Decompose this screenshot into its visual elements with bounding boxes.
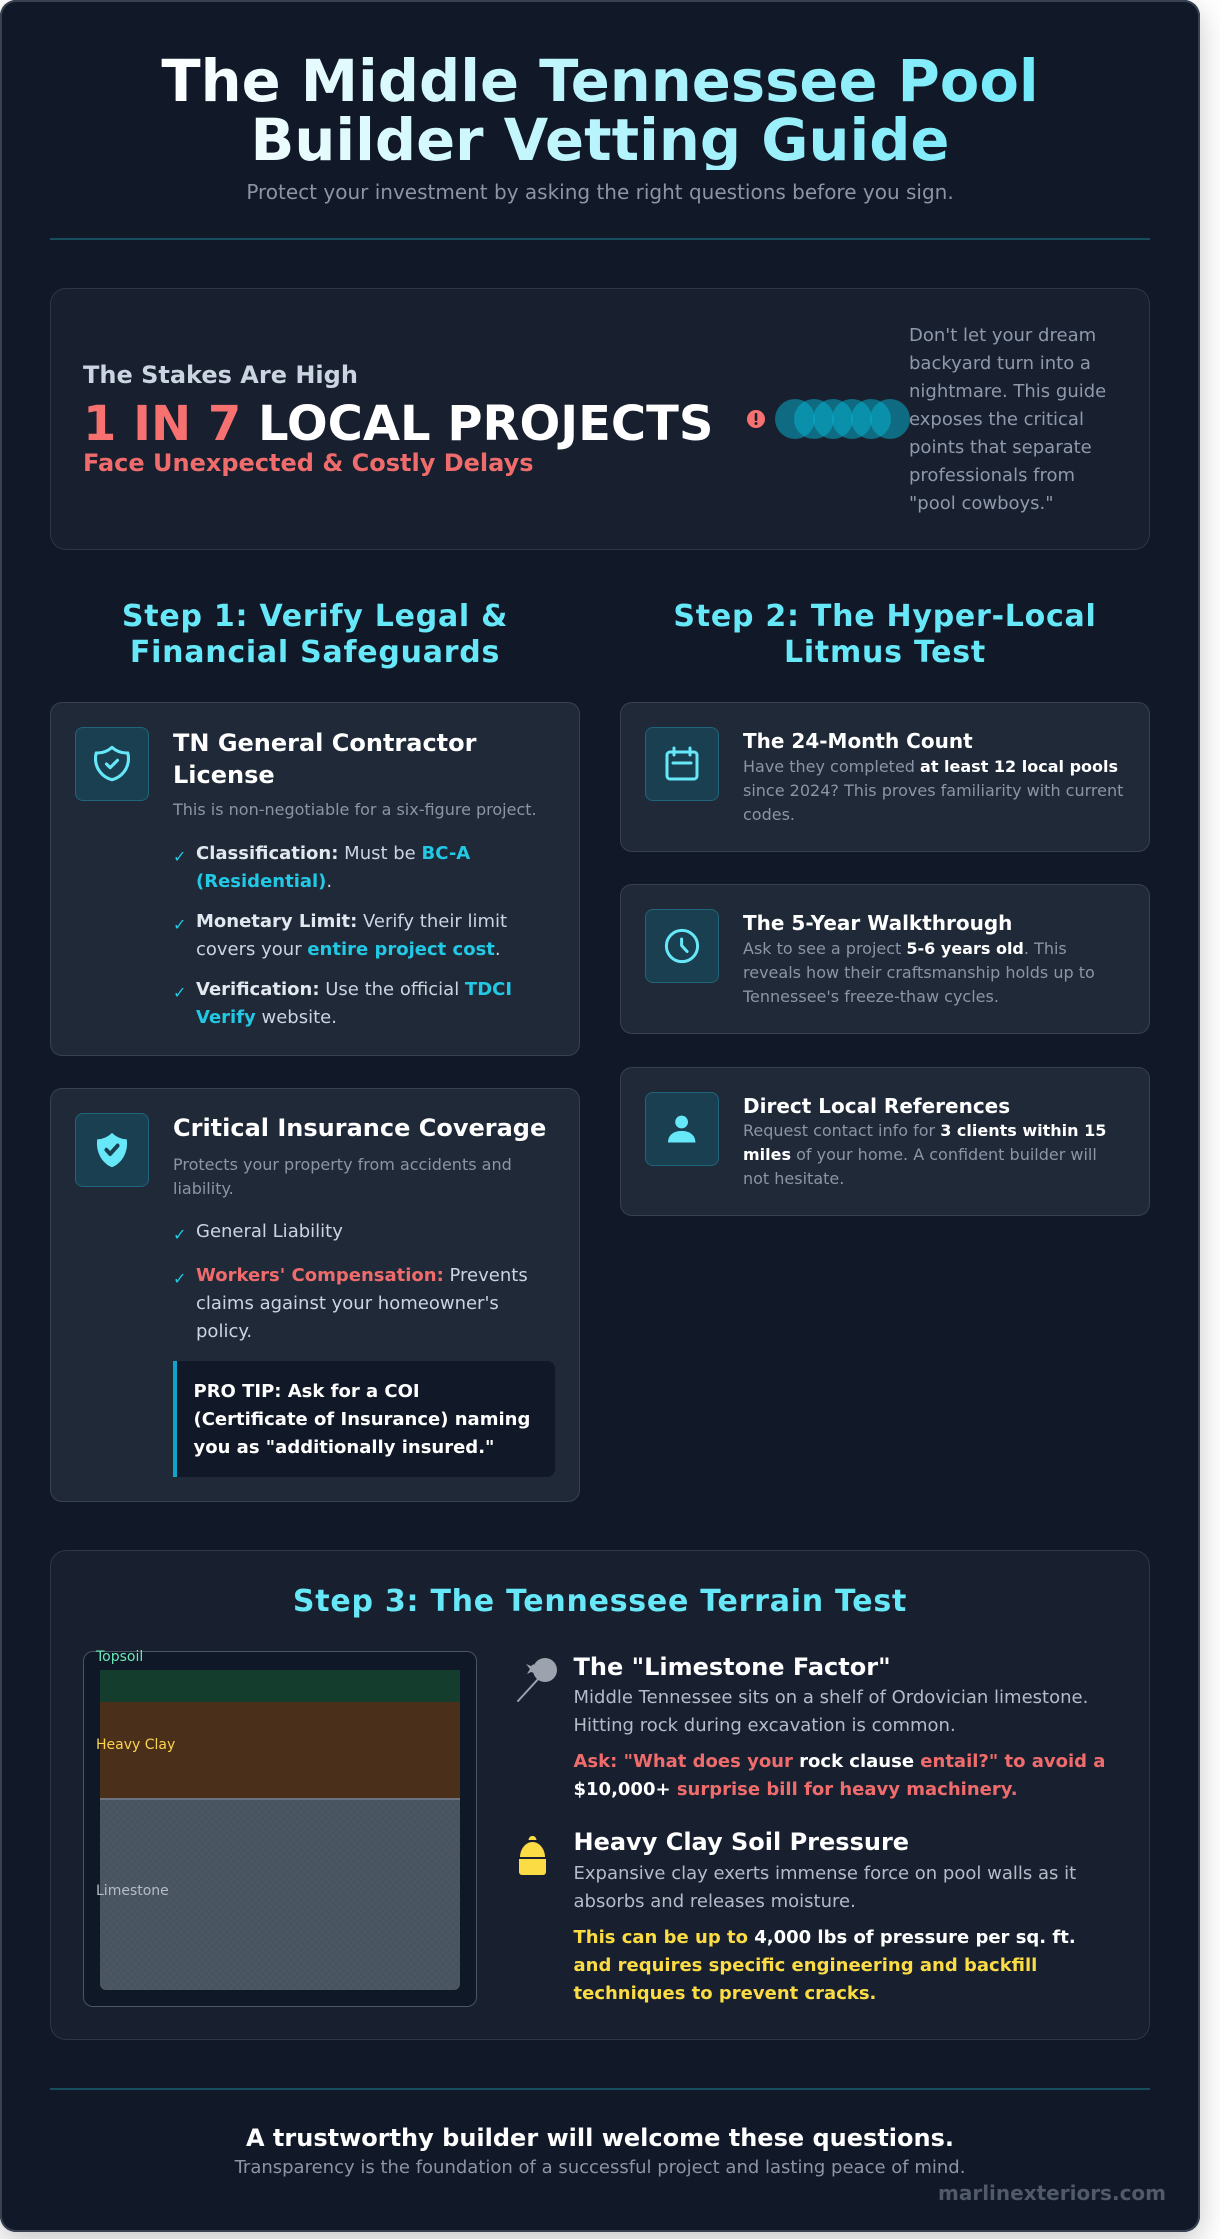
card: contractor license: ✓ [173, 847, 186, 866]
text: clay pressure warning: and requires specific engineering and backfill [574, 1955, 1037, 1976]
layer: limestone [100, 1798, 460, 1990]
hero description: professionals from [909, 465, 1075, 486]
card title: Direct Local References [743, 1094, 1010, 1118]
icon: solid shield check [75, 1113, 149, 1187]
card body: not hesitate. [743, 1169, 844, 1188]
card body: codes. [743, 804, 795, 824]
card body: Have they completed at least 12 local pools [743, 756, 1118, 776]
checklist item: classification [173, 843, 470, 892]
panel: step 1 column [50, 702, 580, 1502]
heading: step 2: Step 2: The Hyper-Local [673, 599, 1097, 634]
panel: step 2 column [620, 702, 1150, 1216]
hero description: nightmare. This guide [909, 381, 1106, 402]
text: clay pressure title: Heavy Clay Soil Pressure [574, 1828, 909, 1856]
card: insurance coverage: ✓ [173, 1225, 186, 1244]
checklist item: verification: Verification: Use the official TDCI [196, 978, 512, 1000]
icon: shield outline check [75, 727, 149, 801]
icon: calendar [645, 727, 719, 801]
hero description: "pool cowboys." [909, 493, 1054, 514]
checklist item: classification: (Residential). [196, 871, 332, 892]
card subtitle: This is non-negotiable for a six-figure project. [173, 800, 537, 819]
text: limestone factor question: Ask: "What does your rock clause entail?" to avoid a [574, 1751, 1105, 1772]
footer subline: Transparency is the foundation of a successful project and lasting peace of mind. [235, 2157, 965, 2178]
text: limestone factor question [574, 1751, 1105, 1800]
card subtitle [173, 1155, 512, 1198]
hero description: exposes the critical [909, 409, 1084, 430]
footer headline: A trustworthy builder will welcome these questions. [246, 2124, 954, 2152]
text: clay pressure warning: techniques to prevent cracks. [574, 1983, 876, 2004]
card title: TN General Contractor [173, 729, 476, 757]
hero kicker: The Stakes Are High [83, 361, 358, 389]
heading: step 1: Step 1: Verify Legal & [122, 599, 508, 634]
card: contractor license: ✓ [173, 982, 186, 1002]
label: topsoil: Topsoil [96, 1649, 143, 1665]
card body: miles of your home. A confident builder will [743, 1145, 1097, 1164]
checklist item: workers compensation: policy. [196, 1321, 252, 1342]
card body: Ask to see a project 5-6 years old. This [743, 938, 1067, 958]
card subtitle: liability. [173, 1179, 234, 1198]
card body: Tennessee's freeze-thaw cycles. [743, 986, 999, 1006]
text: limestone factor body: Hitting rock during excavation is common. [574, 1715, 956, 1736]
heading: step 3: Step 3: The Tennessee Terrain Test [293, 1584, 907, 1619]
text: limestone factor body: Middle Tennessee sits on a shelf of Ordovician limestone. [574, 1687, 1088, 1708]
title: Builder Vetting Guide [250, 107, 950, 174]
hero statistic caption: Face Unexpected & Costly Delays [83, 449, 534, 477]
card: direct references [620, 1066, 1150, 1216]
card: 24-month count [620, 702, 1150, 852]
label: limestone: Limestone [96, 1883, 169, 1899]
icon: pickaxe [517, 1658, 557, 1702]
text: clay pressure body [574, 1863, 1076, 1912]
text: clay pressure body: absorbs and releases moisture. [574, 1891, 856, 1912]
pro tip text: PRO TIP: Ask for a COI [194, 1381, 420, 1402]
pro tip text: (Certificate of Insurance) naming [194, 1409, 530, 1430]
card: 5-year walkthrough [620, 884, 1150, 1034]
card title: The 5-Year Walkthrough [743, 911, 1012, 935]
watermark: brand url: marlinexteriors.com [938, 2181, 1166, 2205]
card title [173, 729, 476, 789]
title [100, 52, 1100, 170]
card body [743, 756, 1123, 824]
card body: since 2024? This proves familiarity with current [743, 780, 1123, 800]
panel: step 3 terrain test [50, 1550, 1150, 2040]
checklist item: verification: Verify website. [196, 1006, 337, 1028]
card: insurance coverage [50, 1088, 580, 1502]
text: limestone factor question: $10,000+ surprise bill for heavy machinery. [574, 1779, 1018, 1800]
card body: reveals how their craftsmanship holds up to [743, 962, 1095, 982]
card: insurance coverage: ✓ [173, 1269, 186, 1288]
heading: step 2: Litmus Test [784, 635, 986, 670]
checklist item: verification [173, 978, 512, 1028]
hero description [909, 325, 1106, 514]
hero description: Don't let your dream [909, 325, 1096, 346]
checklist item: general liability: General Liability [196, 1221, 343, 1242]
callout: pro tip [173, 1361, 555, 1477]
hero description: points that separate [909, 437, 1092, 458]
pro tip text [194, 1381, 530, 1458]
text: limestone factor title: The "Limestone Factor" [574, 1653, 891, 1681]
checklist item: monetary limit: Monetary Limit: Verify their limit [196, 911, 507, 932]
card body [743, 1121, 1106, 1188]
checklist item: workers compensation: Workers' Compensation: Prevents [196, 1265, 528, 1286]
icon: person [645, 1092, 719, 1166]
icon: clay weight [519, 1836, 546, 1875]
checklist item: workers compensation [173, 1265, 528, 1342]
icon: alert and overlapping circles [747, 399, 910, 439]
card body: Request contact info for 3 clients within 15 [743, 1121, 1106, 1140]
panel: stakes hero [50, 288, 1150, 550]
heading: step 1 [122, 599, 508, 670]
text: clay pressure warning: This can be up to 4,000 lbs of pressure per sq. ft. [574, 1927, 1076, 1948]
hero statistic: 1 IN 7 LOCAL PROJECTS [83, 396, 713, 452]
checklist item: workers compensation: claims against your homeowner's [196, 1293, 499, 1314]
text: clay pressure body: Expansive clay exerts immense force on pool walls as it [574, 1863, 1076, 1884]
card title: License [173, 761, 275, 789]
checklist item: classification: Classification: Must be BC-A [196, 843, 470, 864]
subtitle: Protect your investment by asking the right questions before you sign. [246, 180, 954, 204]
card: contractor license [50, 702, 580, 1056]
icon: clock [645, 909, 719, 983]
card title: Critical Insurance Coverage [173, 1114, 546, 1142]
text: limestone factor body [574, 1687, 1088, 1736]
layer: topsoil [100, 1670, 460, 1702]
title: The Middle Tennessee Pool [161, 48, 1039, 115]
checklist item: monetary limit: covers your entire project cost. [196, 939, 501, 960]
card title: The 24-Month Count [743, 729, 973, 753]
card subtitle: Protects your property from accidents and [173, 1155, 512, 1174]
text: clay pressure warning [574, 1927, 1076, 2004]
heading: step 2 [673, 599, 1097, 670]
soil cross-section diagram [83, 1651, 477, 2007]
card: contractor license: ✓ [173, 915, 186, 934]
label: heavy clay: Heavy Clay [96, 1737, 175, 1753]
layer: heavy clay [100, 1702, 460, 1798]
card body [742, 938, 1095, 1006]
heading: step 1: Financial Safeguards [130, 635, 500, 670]
checklist item: monetary limit [173, 911, 507, 960]
hero description: backyard turn into a [909, 353, 1091, 374]
pro tip text: you as "additionally insured." [194, 1437, 494, 1458]
